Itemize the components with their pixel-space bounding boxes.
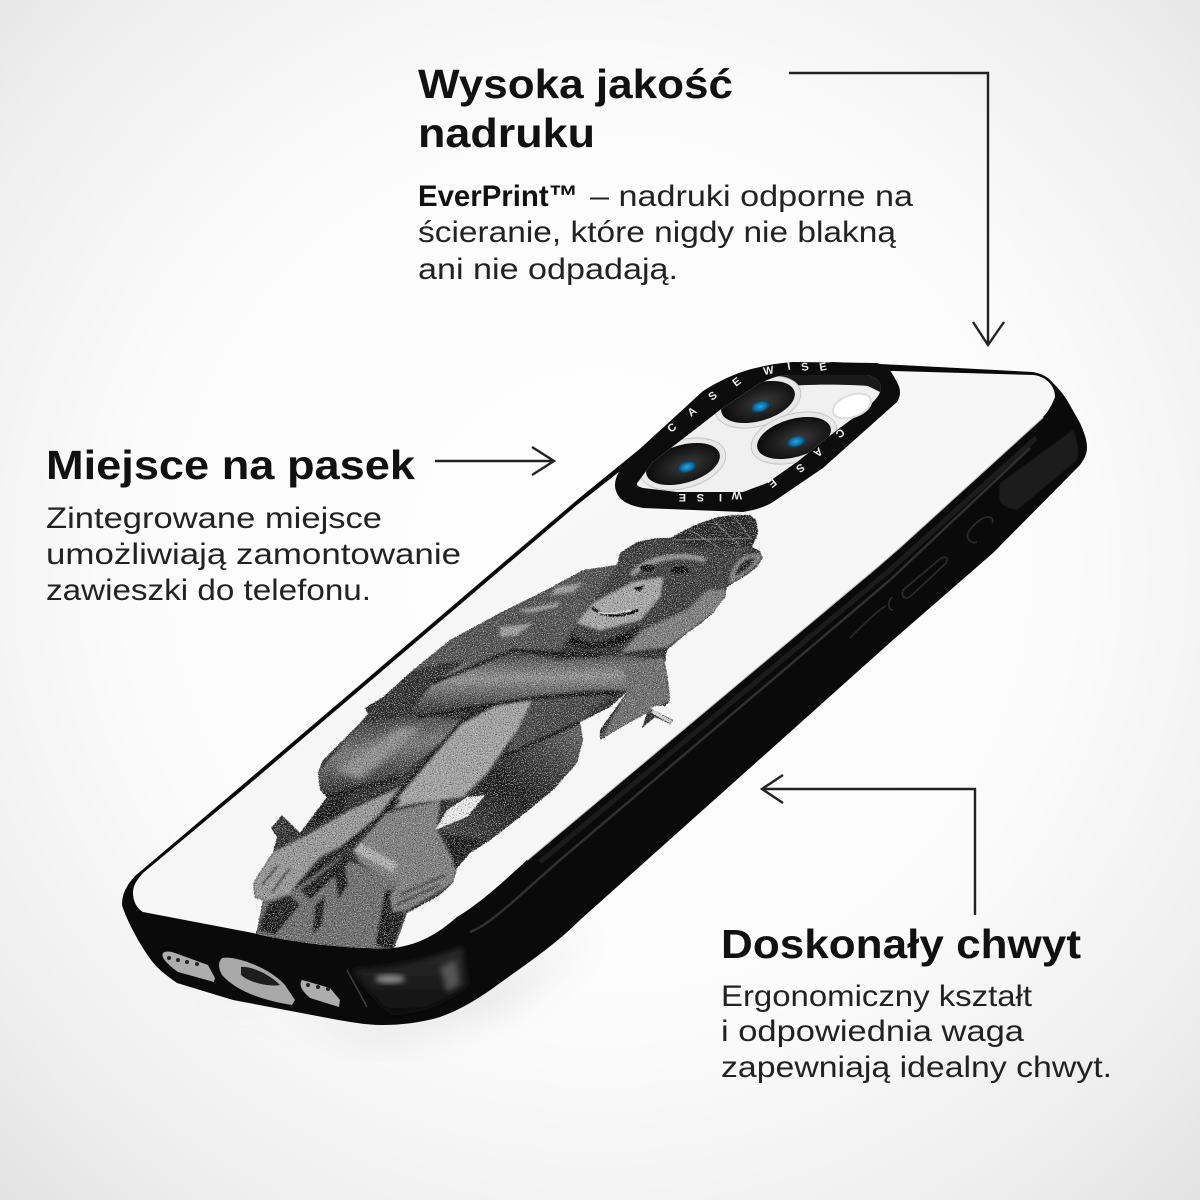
text: print quality: EverPrint™ bbox=[418, 180, 578, 213]
shin bbox=[385, 700, 532, 810]
lens right bbox=[750, 411, 838, 465]
leg gap bbox=[435, 795, 485, 830]
camera window bbox=[637, 375, 881, 492]
camera module bbox=[615, 361, 900, 512]
head bbox=[570, 538, 750, 650]
speaker left bbox=[162, 952, 215, 982]
scarf bbox=[413, 565, 617, 670]
brand text on ring: CASEWISE bbox=[665, 361, 828, 435]
window inner wall bbox=[757, 375, 881, 392]
speaker right bbox=[301, 980, 340, 1007]
arrow: grip bbox=[762, 775, 975, 915]
hand bbox=[600, 657, 670, 740]
lenses bbox=[641, 376, 838, 491]
silhouette base bbox=[250, 510, 770, 955]
left foot bbox=[253, 787, 400, 900]
eyes bbox=[640, 564, 654, 572]
under arm bbox=[507, 694, 612, 754]
mouth bbox=[592, 607, 638, 615]
lower back leg bbox=[445, 835, 490, 870]
side switch bbox=[999, 430, 1078, 510]
brand text on ring: CASEWISE bbox=[679, 426, 847, 503]
phone shadow bbox=[170, 930, 590, 1040]
heading: print quality: Wysoka jakość bbox=[418, 61, 733, 107]
text: strap slot: umożliwiają zamontowanie bbox=[46, 538, 461, 571]
charging port bbox=[219, 958, 295, 1005]
text: print quality: ani nie odpadają. bbox=[418, 253, 678, 286]
phone case bbox=[122, 362, 1087, 1025]
screen back panel bbox=[133, 371, 1055, 948]
left shank bbox=[300, 795, 350, 833]
foot highlight bbox=[357, 847, 395, 868]
inner ear bbox=[735, 558, 756, 577]
cigarette bbox=[652, 711, 671, 722]
creases bbox=[300, 650, 620, 882]
right leg and foot bbox=[353, 800, 457, 912]
arrow: strap slot bbox=[435, 447, 554, 475]
brand text on ring bbox=[665, 361, 847, 503]
heading: strap slot: Miejsce na pasek bbox=[46, 442, 415, 488]
heading: print quality bbox=[418, 61, 733, 156]
thigh bbox=[318, 715, 467, 797]
nose bbox=[633, 585, 645, 592]
text: grip bbox=[721, 980, 1112, 1084]
shoulder right bbox=[620, 590, 727, 653]
trunk bbox=[254, 857, 407, 952]
flash bbox=[829, 389, 875, 423]
brow bbox=[632, 556, 705, 575]
lens left bbox=[641, 437, 726, 491]
forearm bbox=[410, 650, 668, 717]
lens top bbox=[715, 376, 802, 429]
bottom corner gloss bbox=[347, 947, 468, 1016]
text: strap slot: Zintegrowane miejsce bbox=[46, 502, 382, 535]
mouth highlight bbox=[598, 610, 632, 613]
camera ring bbox=[615, 362, 900, 512]
hat bbox=[670, 515, 758, 549]
arrow: print quality bbox=[789, 73, 1004, 345]
text: grip: zapewniają idealny chwyt. bbox=[721, 1051, 1112, 1084]
side band highlights bbox=[470, 417, 1043, 932]
muzzle bbox=[577, 577, 663, 630]
chin shadow bbox=[570, 626, 640, 649]
ear bbox=[730, 554, 763, 583]
volume and action buttons bbox=[850, 517, 993, 638]
thigh highlight bbox=[335, 727, 422, 780]
text: print quality: – nadruki odporne na bbox=[590, 180, 913, 213]
heading: grip: Doskonały chwyt bbox=[721, 921, 1081, 967]
text: print quality bbox=[418, 180, 913, 286]
trunk dark marks bbox=[258, 855, 405, 950]
case body black bbox=[122, 362, 1087, 1025]
text: strap slot bbox=[46, 502, 461, 607]
hip bbox=[440, 722, 583, 840]
hat ribs bbox=[672, 518, 752, 548]
heading: print quality: nadruku bbox=[418, 110, 595, 156]
text: strap slot: zawieszki do telefonu. bbox=[46, 574, 371, 607]
monkey illustration bbox=[250, 510, 770, 955]
text: print quality: ścieranie, które nigdy nie blakną bbox=[418, 216, 896, 249]
text: grip: Ergonomiczny kształt bbox=[721, 980, 1033, 1013]
toes bbox=[262, 865, 445, 905]
text: grip: i odpowiednia waga bbox=[721, 1015, 1024, 1048]
scarf stripes bbox=[500, 583, 583, 637]
